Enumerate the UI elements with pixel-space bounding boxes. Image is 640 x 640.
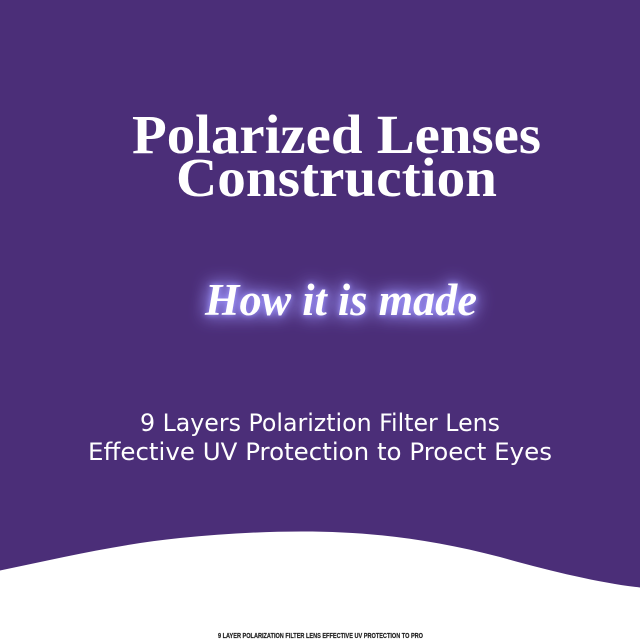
description text — [88, 409, 552, 466]
title: Construction — [176, 147, 497, 208]
title: Polarized Lenses — [132, 104, 541, 165]
white wave footer — [0, 532, 640, 640]
glowing subtitle: How it is made — [204, 275, 477, 325]
description text: 9 Layers Polariztion Filter Lens — [140, 409, 500, 437]
glowing subtitle: How it is made — [204, 275, 477, 325]
title — [132, 104, 541, 208]
description text: Effective UV Protection to Proect Eyes — [88, 438, 552, 466]
footer caption: 9 LAYER POLARIZATION FILTER LENS EFFECTIVE UV PROTECTION TO PRO — [218, 633, 423, 640]
